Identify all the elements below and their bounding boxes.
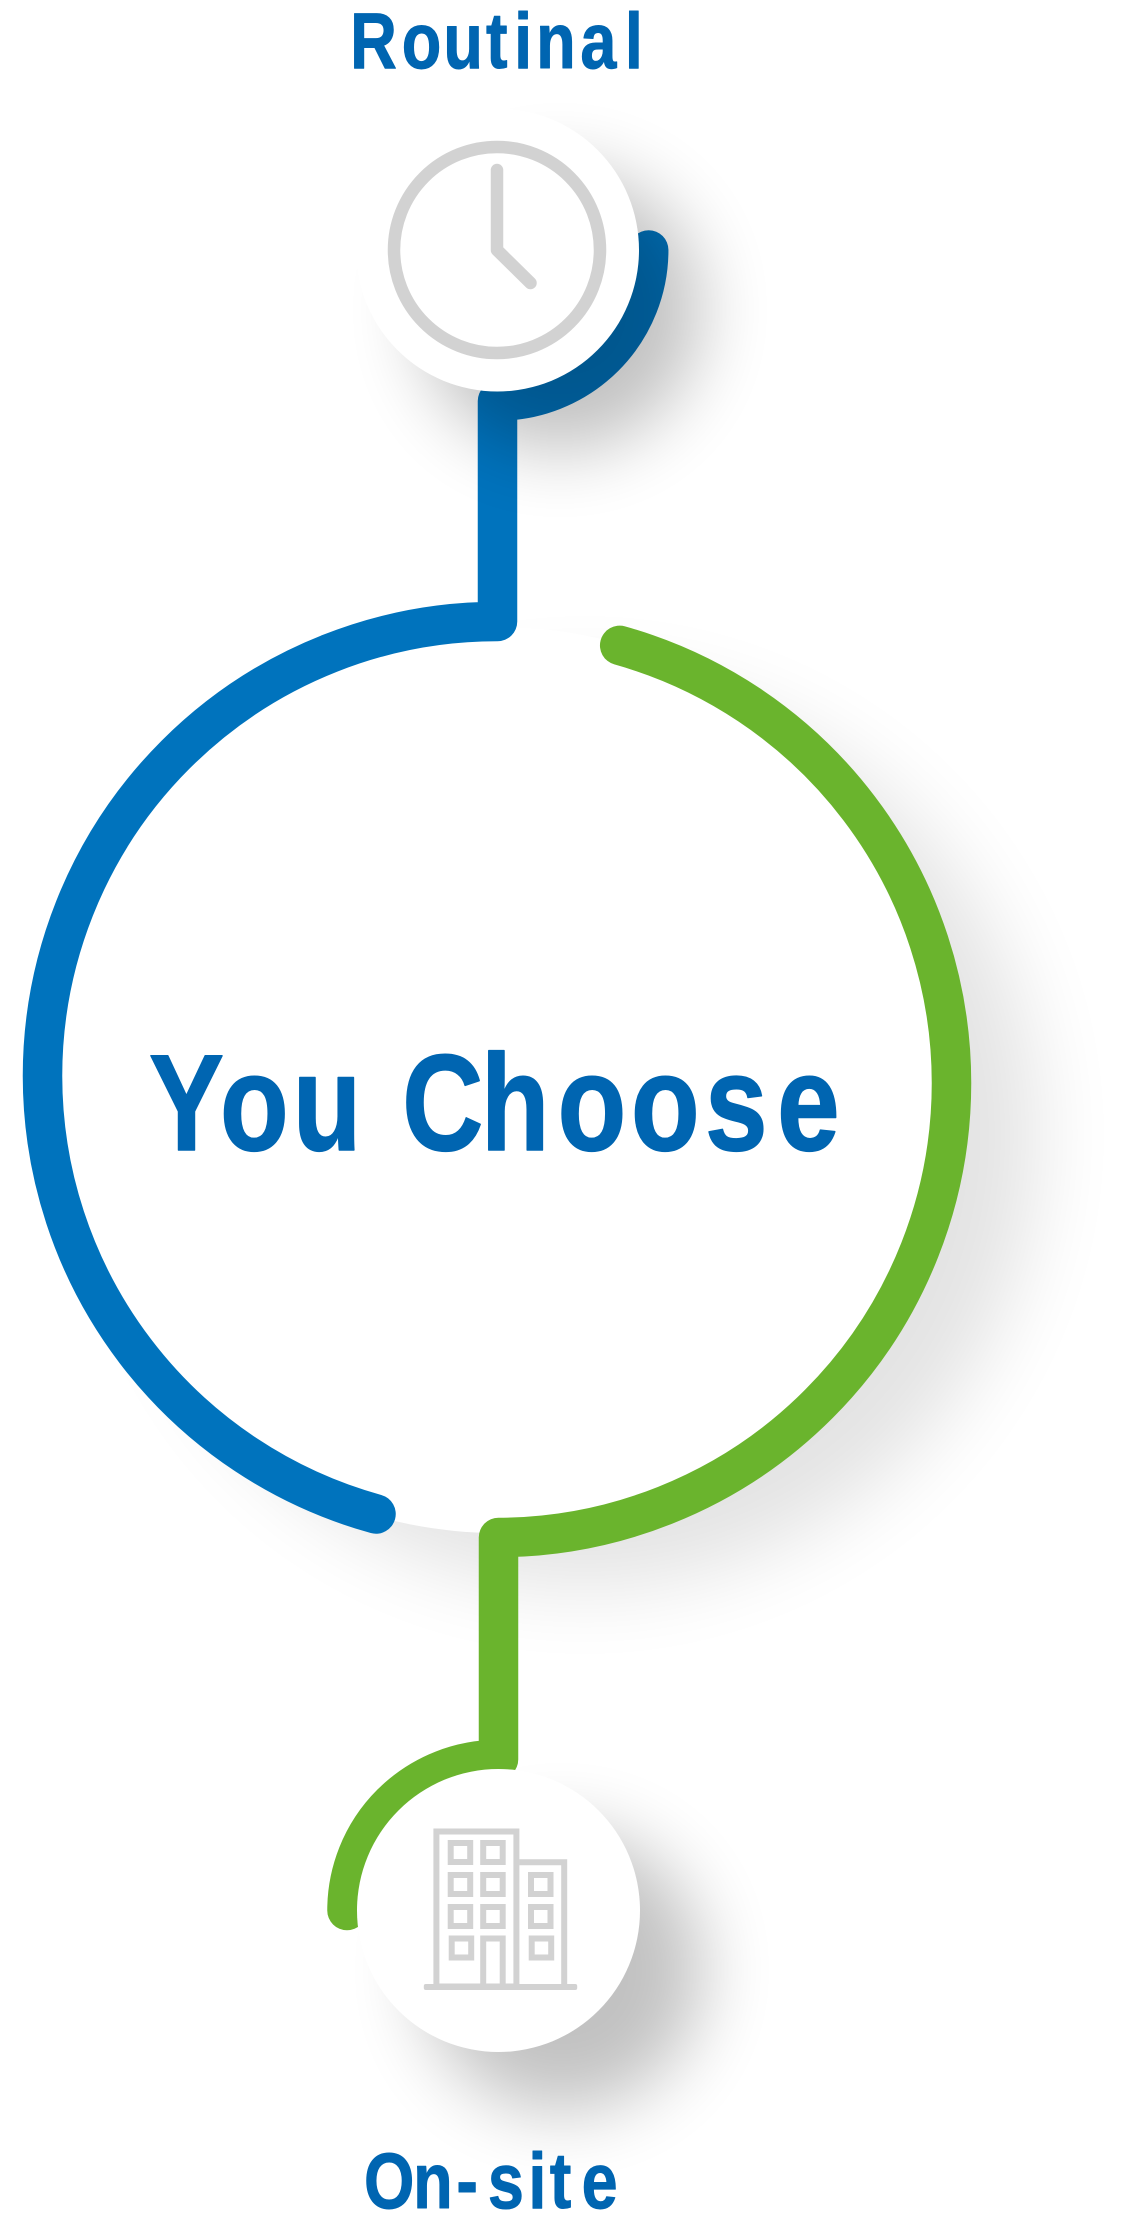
heading: Routinal: Routinal bbox=[350, 0, 643, 85]
central title: You Choose: You Choose bbox=[149, 1026, 840, 1180]
central disc with drop shadow bbox=[45, 627, 1038, 1588]
heading: On-site: On-site bbox=[364, 2138, 618, 2225]
clock badge bbox=[356, 108, 701, 451]
green connector: large arc, stem and small arc to the building bbox=[347, 645, 952, 1910]
icon: building bbox=[424, 1832, 577, 1990]
building badge bbox=[357, 1769, 703, 2111]
blue connector: large arc, stem and small arc to the clock bbox=[42, 250, 649, 1514]
icon: clock bbox=[394, 147, 600, 353]
